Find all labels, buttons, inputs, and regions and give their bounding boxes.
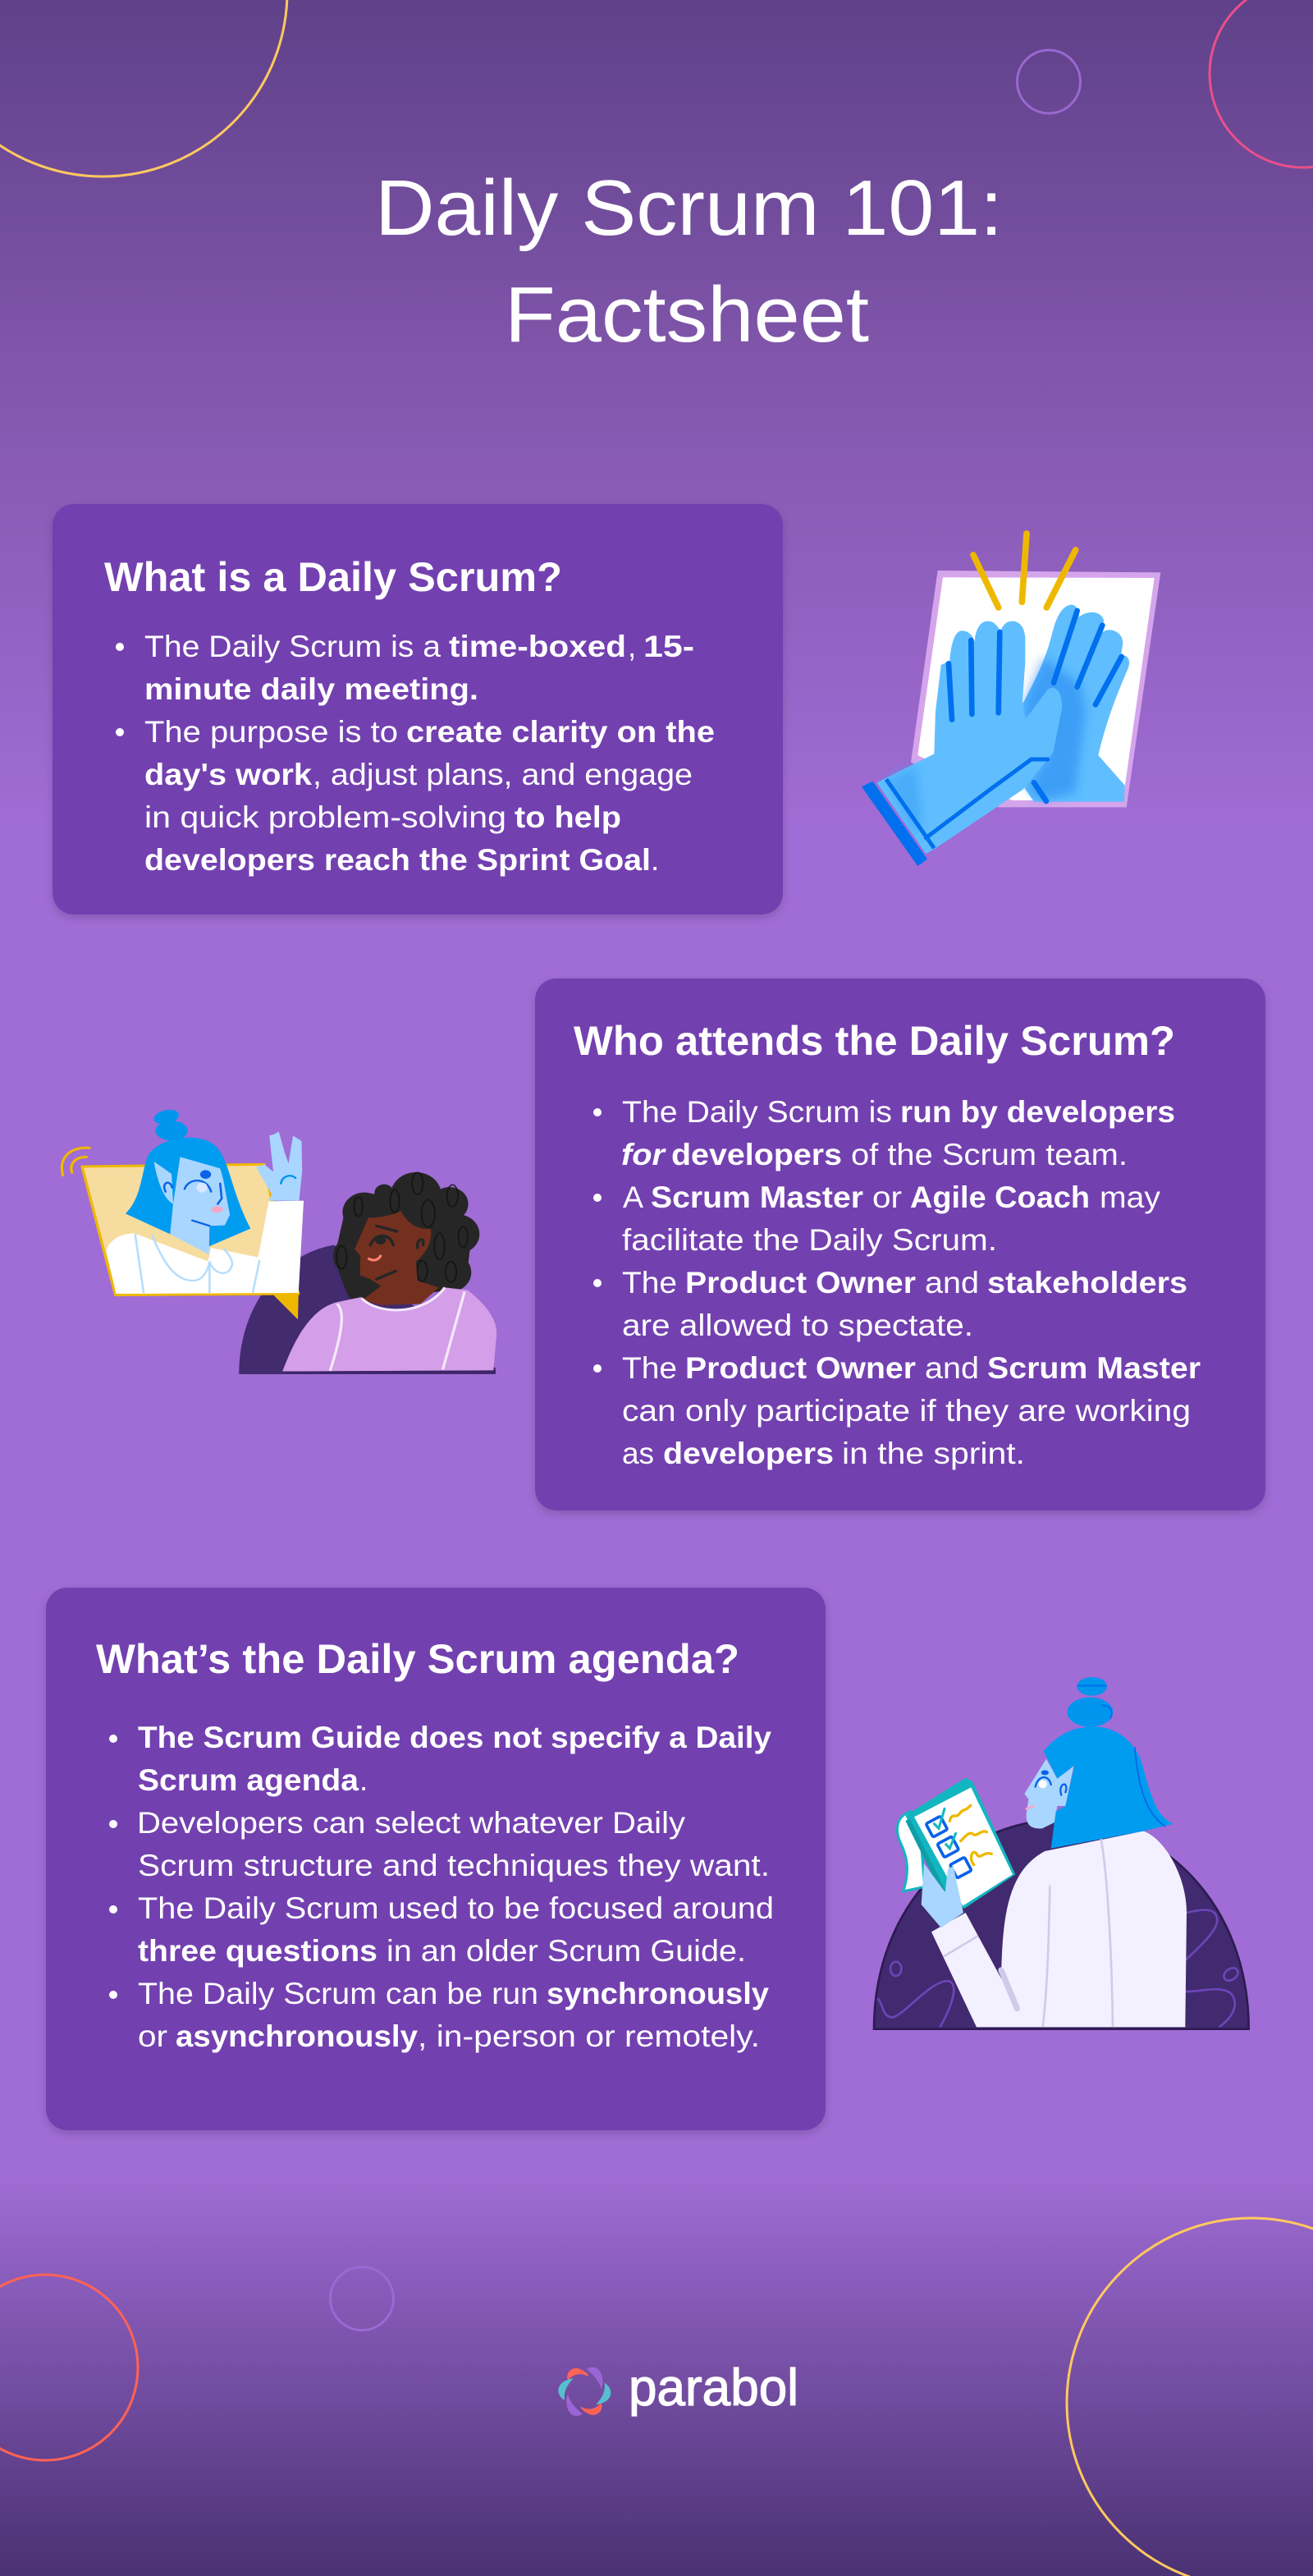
bullet list: what is a daily scrum: The Daily Scrum is a [144, 630, 441, 663]
bullet list: agenda: The Daily Scrum can be run [138, 1977, 538, 2010]
woman on call [107, 1107, 304, 1294]
person watching [282, 1172, 496, 1373]
bullet list: who attends: of the Scrum team. [851, 1138, 1128, 1171]
squiggles [878, 1910, 1240, 2026]
bullet list: agenda: asynchronously [176, 2019, 418, 2053]
bullet list: what is a daily scrum: in quick problem-solving [144, 800, 506, 834]
bullet list: who attends: can only participate if they are working [622, 1394, 1191, 1428]
bullet list: who attends [593, 1095, 1201, 1470]
illustration: high five hands [862, 534, 1160, 866]
title [375, 164, 1003, 359]
bullet list: what is a daily scrum: 15- [643, 630, 694, 663]
bullet list: agenda: The Daily Scrum used to be focused around [138, 1891, 774, 1925]
hand holding notebook [922, 1863, 963, 1927]
bullet list: agenda [109, 1721, 774, 2053]
bullet list: who attends: are allowed to spectate. [622, 1309, 973, 1342]
panel: agenda [46, 1588, 826, 2130]
front hand [862, 621, 1062, 866]
bullet list: who attends: Product Owner [685, 1351, 916, 1385]
bullet list: agenda: or [138, 2019, 167, 2053]
parabol logo [558, 2359, 798, 2417]
bullet list: who attends: facilitate the Daily Scrum. [622, 1223, 997, 1257]
heading: what is a daily scrum: What is a Daily Scrum? [104, 554, 562, 600]
illustration: person reading checklist [874, 1677, 1249, 2029]
wifi arcs [62, 1148, 89, 1176]
heading: agenda: What’s the Daily Scrum agenda? [96, 1636, 739, 1682]
bullet list: agenda: . [359, 1763, 368, 1797]
bullet list: what is a daily scrum: . [651, 843, 659, 877]
decorative circle: yellow bottom right [1067, 2218, 1313, 2576]
panel: what is a daily scrum [53, 504, 783, 914]
bullet list: what is a daily scrum: The purpose is to [144, 715, 398, 749]
bullet list: who attends: may [1100, 1180, 1161, 1214]
decorative circle: coral bottom left [0, 2275, 138, 2460]
body and sweater [931, 1831, 1187, 2027]
decorative circle: small purple bottom [330, 2267, 394, 2330]
title: Factsheet [505, 271, 869, 359]
yellow rays [973, 534, 1076, 607]
bullet list: who attends: developers [663, 1437, 834, 1470]
illustration: video call [62, 1107, 496, 1374]
logo wordmark: parabol [629, 2359, 798, 2417]
bullet list: who attends: stakeholders [987, 1266, 1187, 1299]
bullet list: who attends: Agile Coach [910, 1180, 1090, 1214]
video call card [82, 1164, 299, 1319]
bullet list: agenda: , in-person or remotely. [418, 2019, 760, 2053]
bullet list: what is a daily scrum: minute daily meeting. [144, 672, 478, 706]
bullet list: what is a daily scrum: to help [515, 800, 621, 834]
decorative circle: small purple top [1018, 50, 1080, 113]
bullet list: agenda: synchronously [547, 1977, 769, 2010]
bullet list: who attends: Scrum Master [987, 1351, 1201, 1385]
bullet list: what is a daily scrum: time-boxed [449, 630, 626, 663]
heading: who attends: Who attends the Daily Scrum? [574, 1018, 1175, 1064]
panel: who attends [535, 979, 1265, 1510]
bullet list: who attends: Product Owner [685, 1266, 916, 1299]
bullet list: who attends: The [622, 1351, 677, 1385]
bullet list: who attends: for [621, 1138, 667, 1171]
bullet list: agenda: Scrum agenda [138, 1763, 359, 1797]
bullet list: who attends: as [622, 1437, 654, 1470]
dark semicircle backdrop [239, 1245, 496, 1374]
bullet list: who attends: run by developers [900, 1095, 1175, 1129]
bullet list: agenda: Developers can select whatever Daily [137, 1806, 686, 1840]
bullet list: what is a daily scrum: , adjust plans, and engage [313, 758, 693, 791]
dark semicircle backdrop [874, 1820, 1249, 2029]
bullet list: what is a daily scrum: , [628, 630, 636, 663]
bullet list: who attends: or [872, 1180, 902, 1214]
bullet list: agenda: three questions [138, 1934, 377, 1968]
checklist notebook [897, 1778, 1015, 1909]
logo mark [558, 2367, 611, 2416]
title: Daily Scrum 101: [375, 164, 1003, 252]
bullet list: who attends: developers [671, 1138, 842, 1171]
bullet list: who attends: in the sprint. [842, 1437, 1025, 1470]
bullet list: what is a daily scrum [116, 630, 715, 877]
bullet list: what is a daily scrum: create clarity on the [406, 715, 715, 749]
decorative circle: yellow top left [0, 0, 287, 176]
bullet list: agenda: Scrum structure and techniques they want. [138, 1849, 770, 1882]
bullet list: who attends: The Daily Scrum is [622, 1095, 892, 1129]
bullet list: who attends: A [623, 1180, 643, 1214]
bullet list: agenda: in an older Scrum Guide. [387, 1934, 746, 1968]
picture frame [911, 571, 1160, 807]
back hand [1023, 605, 1129, 802]
decorative circle: pink top right [1210, 0, 1313, 167]
hair and head [1024, 1677, 1173, 1849]
bullet list: what is a daily scrum: day's work [144, 758, 312, 791]
bullet list: who attends: Scrum Master [651, 1180, 863, 1214]
bullet list: who attends: and [925, 1266, 979, 1299]
bullet list: agenda: The Scrum Guide does not specify a Daily [138, 1721, 771, 1754]
bullet list: what is a daily scrum: developers reach the Sprint Goal [144, 843, 651, 877]
bullet list: who attends: The [622, 1266, 677, 1299]
bullet list: who attends: and [925, 1351, 979, 1385]
